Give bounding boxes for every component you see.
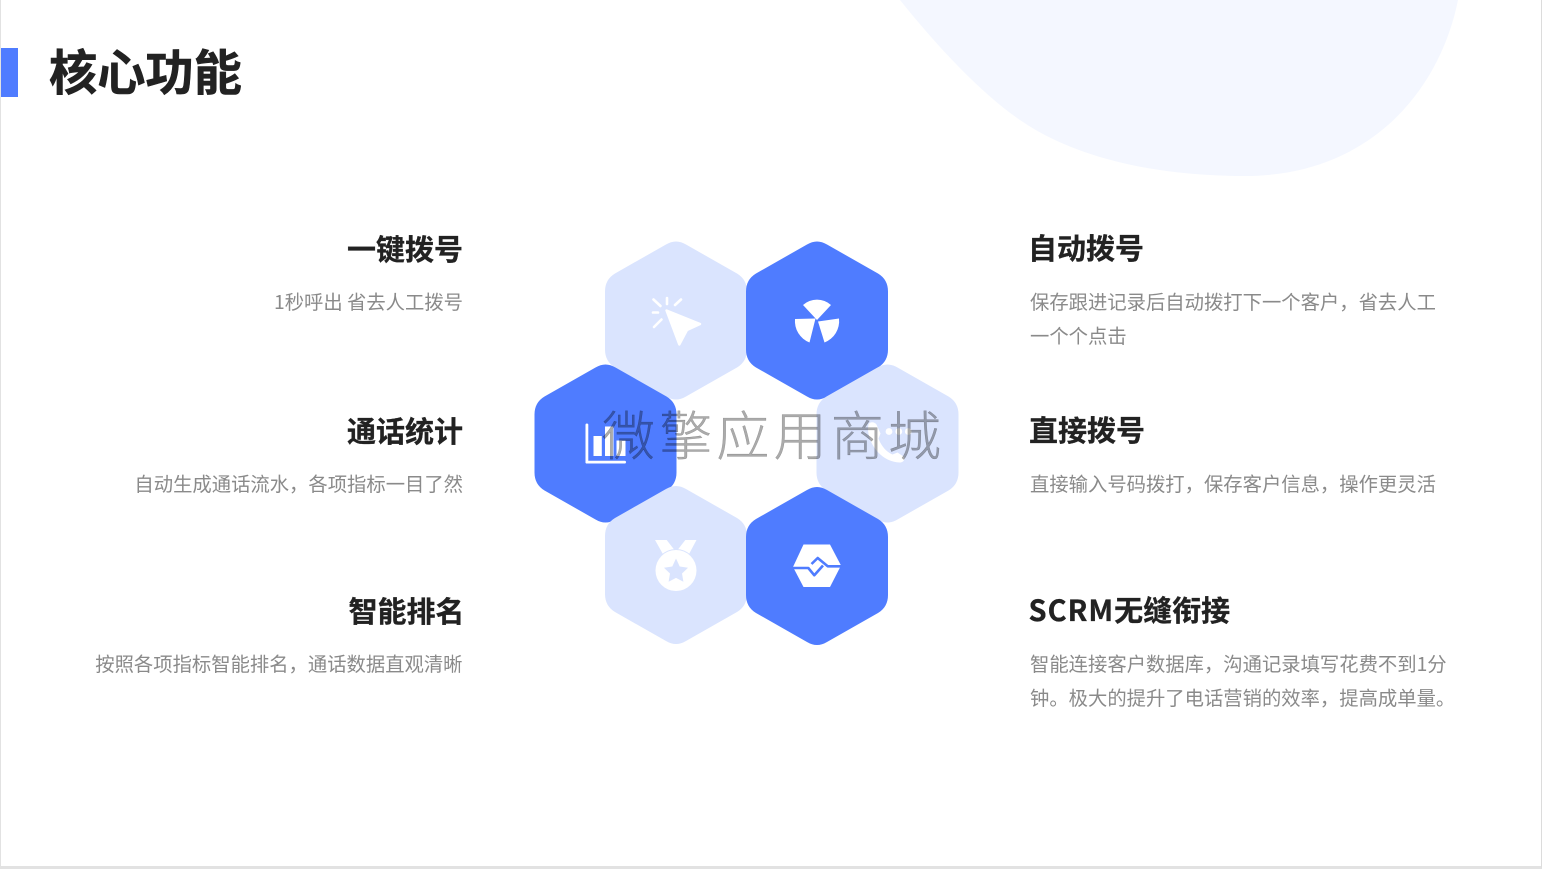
heading: 通话统计 xyxy=(347,408,463,450)
feature: 一键拨号 xyxy=(274,226,463,315)
feature: 直接拨号 xyxy=(1029,408,1436,497)
description: 钟。极大的提升了电话营销的效率，提高成单量。 xyxy=(1030,683,1455,711)
icon: cursor xyxy=(653,298,700,344)
feature: 通话统计 xyxy=(134,408,463,497)
hexagon: radiation pie xyxy=(746,242,888,400)
heading: 直接拨号 xyxy=(1029,408,1145,450)
description: 自动生成通话流水，各项指标一目了然 xyxy=(134,469,463,497)
hexagon: bar chart xyxy=(534,364,676,522)
description xyxy=(1030,287,1436,349)
feature: 自动拨号 xyxy=(1028,226,1436,349)
feature: 智能排名 xyxy=(95,588,464,677)
heading: 一键拨号 xyxy=(347,226,463,268)
watermark: 微擎应用商城 xyxy=(602,395,945,471)
icon: medal xyxy=(654,540,698,592)
title: 核心功能 xyxy=(49,34,242,104)
hexagon: link shield xyxy=(746,487,888,645)
icon: hexagon link xyxy=(791,544,843,587)
description: 一个个点击 xyxy=(1030,321,1127,349)
icon: three-blade pie xyxy=(795,300,839,342)
heading: 自动拨号 xyxy=(1028,226,1144,268)
feature: SCRM无缝衔接 xyxy=(1028,588,1455,711)
description: 保存跟进记录后自动拨打下一个客户，省去人工 xyxy=(1030,287,1436,315)
heading: 智能排名 xyxy=(348,588,464,630)
icon: bar chart xyxy=(586,424,626,464)
description: 智能连接客户数据库，沟通记录填写花费不到1分 xyxy=(1030,649,1447,677)
description: 按照各项指标智能排名，通话数据直观清晰 xyxy=(95,649,462,677)
icon: phone with dots xyxy=(868,422,912,462)
title accent bar xyxy=(1,48,18,97)
heading: SCRM无缝衔接 xyxy=(1028,588,1230,630)
hexagon: cursor click xyxy=(605,242,747,400)
hexagon: medal xyxy=(605,486,747,644)
description: 直接输入号码拨打，保存客户信息，操作更灵活 xyxy=(1030,469,1436,497)
description xyxy=(1030,649,1455,711)
description: 1秒呼出 省去人工拨号 xyxy=(274,287,463,315)
hexagon: phone xyxy=(816,364,958,522)
